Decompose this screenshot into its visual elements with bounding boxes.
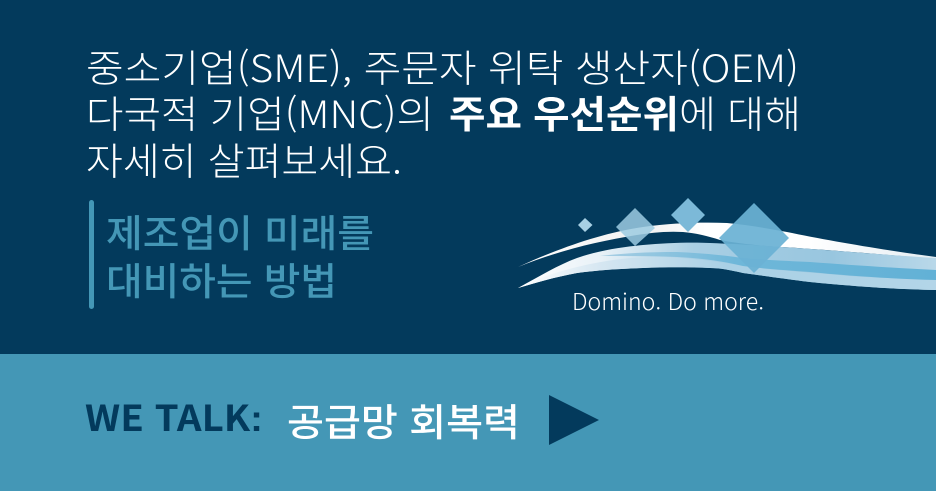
- arrow icon: [549, 395, 599, 445]
- diamond 3: [671, 198, 705, 232]
- small diamond: [578, 218, 592, 232]
- diamond 2: [616, 208, 655, 246]
- topic label: 공급망 회복력: [287, 392, 520, 447]
- panel: call to action band: [0, 354, 936, 491]
- heading: main message: 중소기업(SME), 주문자 위탁 생산자(OEM): [86, 38, 799, 93]
- WE TALK label: WE TALK :: [85, 390, 263, 442]
- lower band tint: [518, 257, 936, 290]
- heading: main message: 자세히 살펴보세요.: [86, 131, 402, 186]
- darker stripe: [600, 252, 936, 280]
- tagline: Domino. Do more.: [572, 283, 764, 317]
- subheading: 대비하는 방법: [106, 251, 337, 306]
- panel: dark background: [0, 0, 936, 355]
- subheading: [106, 203, 374, 306]
- heading: main message: [86, 38, 801, 186]
- heading: main message: 다국적 기업(MNC)의: [86, 84, 434, 139]
- heading: main message: 에 대해: [679, 84, 801, 139]
- white swoosh: [518, 223, 936, 267]
- heading: main message: 주요 우선순위: [449, 84, 679, 139]
- blue swoosh upper and lower bands: [518, 243, 936, 290]
- large diamond: [719, 203, 789, 273]
- accent bar: [89, 200, 94, 309]
- subheading: 제조업이 미래를: [106, 203, 374, 258]
- logo: Domino swoosh and diamonds: [518, 198, 936, 317]
